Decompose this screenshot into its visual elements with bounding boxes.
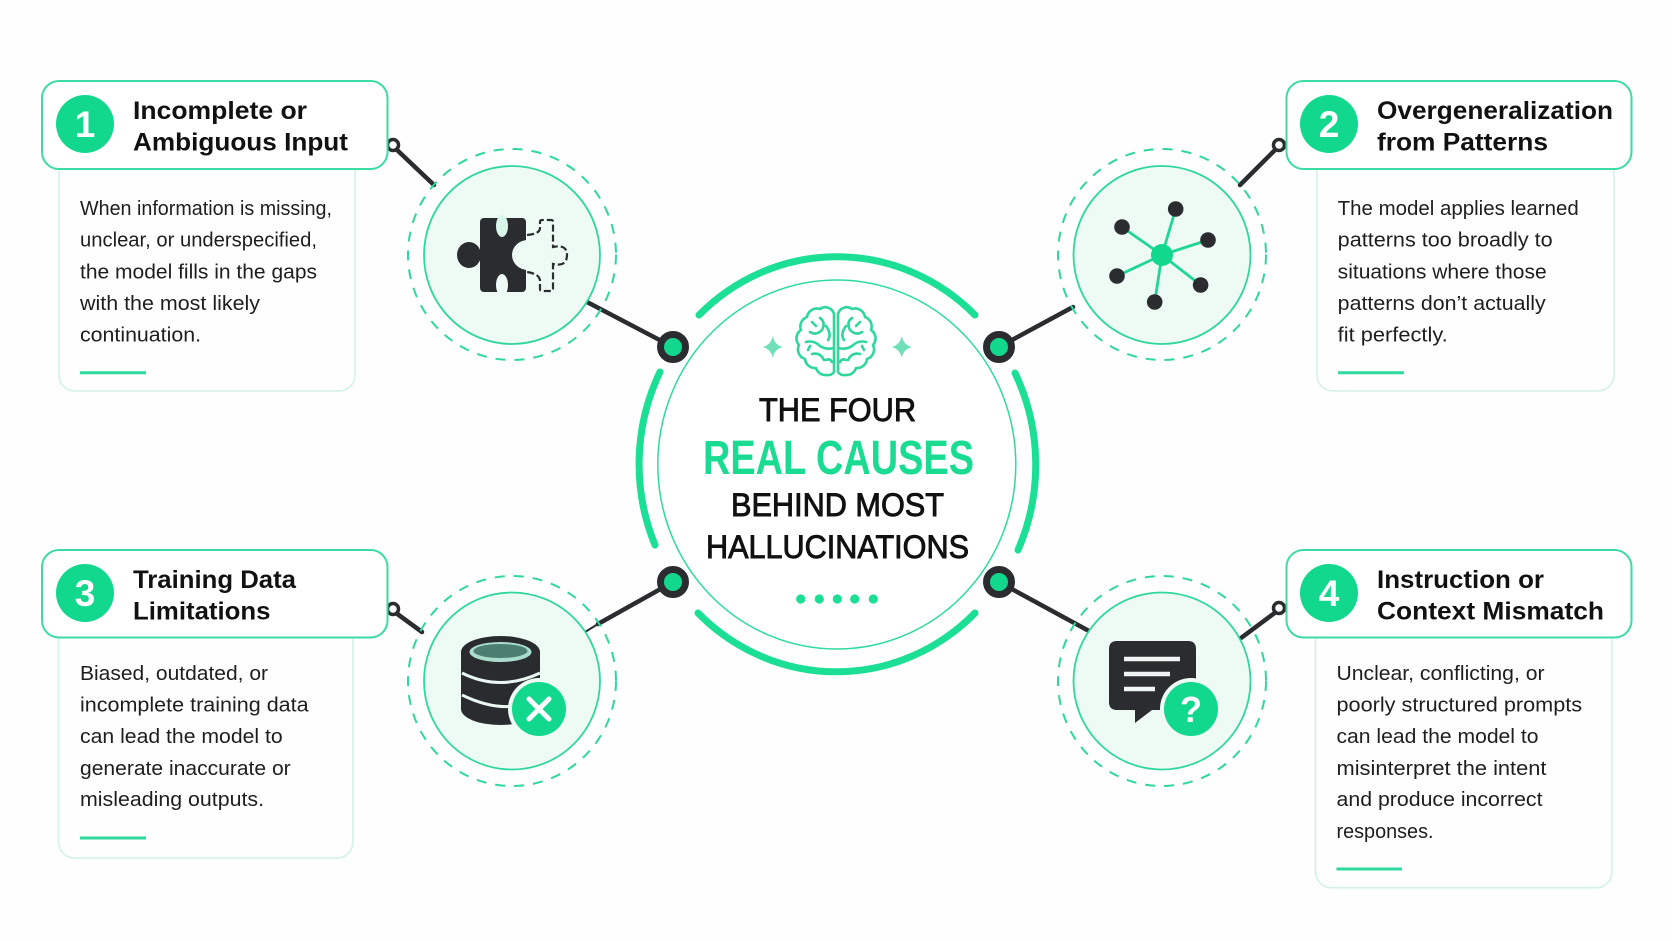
header <box>1286 81 1632 169</box>
node: top right <box>986 334 1012 360</box>
body card <box>58 620 353 858</box>
body card: The model applies learned <box>1338 198 1579 220</box>
header: Incomplete or <box>133 97 307 125</box>
panel: cause 2 <box>1286 81 1632 391</box>
body card: patterns too broadly to <box>1338 230 1553 252</box>
body card: and produce incorrect <box>1336 789 1543 811</box>
header: Limitations <box>133 598 270 626</box>
body card: can lead the model to <box>1336 726 1538 748</box>
body card: responses. <box>1336 821 1434 843</box>
node: bottom left <box>660 570 686 594</box>
body card: with the most likely <box>79 293 260 315</box>
body card: patterns don’t actually <box>1338 293 1546 315</box>
icon circle 4: chat <box>1058 576 1266 786</box>
body card: misinterpret the intent <box>1336 758 1547 780</box>
icon: chat bubble with question badge <box>1109 641 1222 740</box>
panel: cause 1 <box>42 81 388 391</box>
body card: incomplete training data <box>80 695 310 717</box>
title: REAL CAUSES <box>703 432 974 485</box>
body card: the model fills in the gaps <box>80 262 317 284</box>
body card: Biased, outdated, or <box>80 663 268 685</box>
header: Ambiguous Input <box>133 128 349 156</box>
icon: chat bubble with question badge: ? <box>1180 689 1202 730</box>
body card <box>59 150 355 391</box>
body card <box>1316 620 1612 888</box>
body card: generate inaccurate or <box>80 758 291 780</box>
header: from Patterns <box>1377 128 1548 156</box>
body card: continuation. <box>80 325 201 347</box>
header: 4 <box>1319 573 1340 614</box>
body card: When information is missing, <box>80 198 332 220</box>
title: THE FOUR <box>759 392 916 428</box>
connectors from centre hub to icons <box>585 302 1089 632</box>
icon: puzzle piece <box>457 215 567 296</box>
icon: database with error badge <box>461 636 570 740</box>
header <box>42 550 388 638</box>
icon: sparkle right <box>892 336 912 358</box>
header <box>1286 550 1632 638</box>
title: BEHIND MOST <box>731 487 944 523</box>
node: bottom right <box>986 570 1012 594</box>
centre hub <box>639 257 1036 672</box>
icon circle 3: database <box>408 576 616 786</box>
header: Context Mismatch <box>1377 598 1604 626</box>
header: Overgeneralization <box>1377 97 1613 125</box>
body card: poorly structured prompts <box>1336 695 1582 717</box>
icon circle 1: puzzle <box>408 149 616 360</box>
body card: misleading outputs. <box>80 789 264 811</box>
connectors from cards to icons <box>388 140 1284 638</box>
dot row <box>796 594 878 604</box>
panel: cause 3 <box>42 550 388 858</box>
header: 2 <box>1319 104 1339 145</box>
node: top left <box>660 334 686 360</box>
body card: unclear, or underspecified, <box>80 230 317 252</box>
header <box>42 81 388 169</box>
outer arc segments <box>639 257 1036 672</box>
header: Training Data <box>133 566 297 594</box>
title <box>703 392 974 565</box>
body card: fit perfectly. <box>1338 325 1448 347</box>
title: HALLUCINATIONS <box>706 529 969 565</box>
body card: can lead the model to <box>80 726 283 748</box>
header: 1 <box>75 104 95 145</box>
icon: brain <box>796 307 876 375</box>
icon: network graph <box>1109 201 1216 310</box>
panel: cause 4 <box>1286 550 1632 888</box>
header: Instruction or <box>1377 566 1544 594</box>
inner circle <box>658 280 1016 649</box>
body card: Unclear, conflicting, or <box>1336 663 1545 685</box>
header: 3 <box>75 573 95 614</box>
icon circle 2: network <box>1058 149 1266 360</box>
icon: sparkle left <box>762 336 783 358</box>
body card: situations where those <box>1338 262 1547 284</box>
body card <box>1317 150 1614 391</box>
